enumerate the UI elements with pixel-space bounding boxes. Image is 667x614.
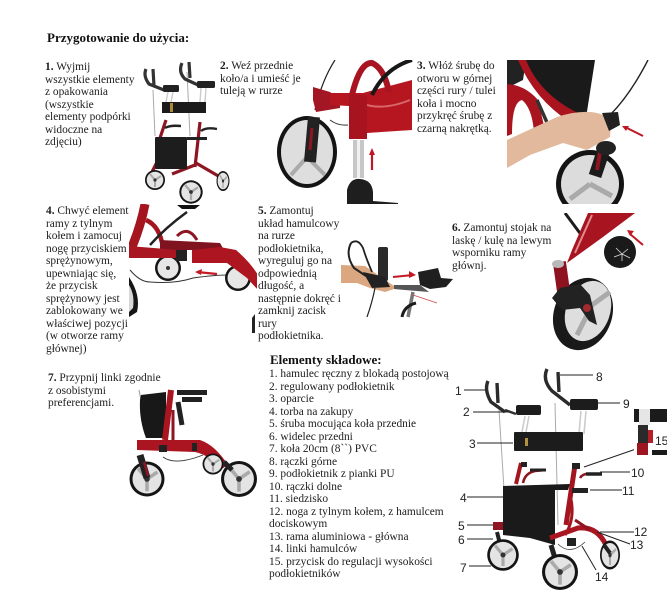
part number labels [455, 370, 648, 584]
text: step 3: koła i mocno [417, 98, 476, 110]
text: step 4 [46, 205, 129, 354]
list: parts: 2. regulowany podłokietnik [269, 380, 395, 392]
part number labels: 13 [630, 538, 644, 552]
text: step 4: (w otworze ramy [46, 330, 124, 342]
text: step 5: 5. Zamontuj [258, 205, 314, 217]
text: step 4: nogę przyciskiem [46, 242, 127, 254]
text: step 4: ramy z tylnym [46, 218, 112, 230]
text: step 5 [258, 205, 341, 342]
image: rear leg frame assembly, step 4 [129, 204, 258, 317]
text: step 1: elementy podpórki [45, 111, 131, 123]
part number labels: 4 [460, 491, 467, 505]
text: step 7: 7. Przypnij linki zgodnie [48, 372, 161, 384]
part number labels: 11 [622, 484, 635, 498]
list: parts: 6. widelec przedni [269, 430, 353, 442]
part number labels: 8 [596, 370, 603, 384]
text: step 1: z opakowania [45, 86, 108, 98]
text: step 6: wsporniku ramy [452, 247, 526, 259]
text: step 5: podłokietnika, [258, 242, 324, 254]
list: parts [269, 368, 449, 580]
illustrations layer [129, 60, 667, 590]
text: step 4: głównej) [46, 342, 86, 354]
image: folded walker side view, step 7 [130, 390, 257, 497]
list: parts: 7. koła 20cm (8``) PVC [269, 443, 377, 455]
list: parts: 14. linki hamulców [269, 543, 357, 555]
list: parts: 9. podłokietnik z pianki PU [269, 468, 395, 480]
text: step 1: zdjęciu) [45, 136, 82, 148]
heading: Elementy składowe: Elementy składowe: [270, 352, 382, 367]
text: step 3 [417, 60, 496, 134]
text: step 5: podłokietnika. [258, 330, 324, 342]
list: parts: 13. rama aluminiowa - główna [269, 530, 408, 542]
text: step 6: laskę / kulę na lewym [452, 234, 551, 246]
text: step 4: 4. Chwyć element [46, 205, 129, 217]
text: step 5: na rurze [258, 230, 295, 242]
text: step 4: sprężynowym, [46, 255, 113, 267]
text: step 4: zablokowany we [46, 305, 123, 317]
part number labels: 7 [460, 561, 467, 575]
text: step 4: że przycisk [46, 280, 98, 292]
text: step 3: części rury / tulei [417, 85, 496, 97]
text: step 7: z osobistymi [48, 384, 106, 396]
text: step 6 [452, 222, 552, 272]
part number labels: 3 [469, 437, 476, 451]
text: step 1: wszystkie elementy [45, 74, 135, 86]
text: step 1: widoczne na [45, 124, 102, 136]
list: parts: 11. siedzisko [269, 493, 328, 505]
list: parts: 4. torba na zakupy [269, 406, 353, 418]
part number labels: 10 [631, 466, 645, 480]
part number labels: 5 [458, 519, 465, 533]
text: step 2: koło/a i umieść je [220, 72, 301, 84]
text: step 4: właściwej pozycji [46, 318, 128, 330]
title: Przygotowanie do użycia: Przygotowanie do użycia: [47, 30, 189, 45]
text: step 3: otworu w górnej [417, 72, 492, 84]
text: step 2: tuleją w rurze [220, 85, 283, 97]
list: parts: 10. rączki dolne [269, 480, 342, 492]
walker body [487, 369, 620, 590]
leader lines [464, 375, 636, 570]
text: step 1: 1. Wyjmij [45, 61, 90, 73]
text: step 5: rury [258, 318, 277, 330]
image: hand tightening screw, step 3 [507, 60, 648, 218]
image: front wheel fitting, step 2 [277, 60, 412, 205]
image: brake grip on armrest, step 5 [252, 241, 453, 333]
text: step 5: odpowiednią [258, 268, 317, 280]
text: step 2: 2. Weź przednie [220, 60, 293, 72]
text: step 7: preferencjami. [48, 397, 114, 409]
list: parts: 5. śruba mocująca koła przednie [269, 418, 416, 430]
text: step 5: następnie dokręć i [258, 292, 341, 304]
part number labels: 2 [463, 405, 470, 419]
text: step 1 [45, 61, 135, 148]
part number labels: 1 [455, 384, 462, 398]
text: step 6: głównj. [452, 260, 486, 272]
list: parts: podłokietników [269, 568, 341, 580]
inset: height adjustment button [634, 409, 667, 455]
list: parts: 15. przycisk do regulacji wysokości [269, 556, 433, 568]
part number labels: 9 [623, 397, 630, 411]
part number labels: 14 [595, 570, 609, 584]
text: step 4: upewniając się, [46, 268, 116, 280]
text: step 3: przykręć śrubę z [417, 110, 492, 122]
image: cane holder on frame, step 6 [552, 213, 644, 350]
text: step 4: sprężynowy jest [46, 292, 120, 304]
text: step 5: długość, a [258, 280, 304, 292]
image: labelled walker diagram [455, 369, 667, 590]
list: parts: 12. noga z tylnym kołem, z hamulcem [269, 506, 444, 518]
list: parts: dociskowym [269, 518, 327, 530]
text: step 1: (wszystkie [45, 98, 94, 110]
part number labels: 12 [634, 525, 648, 539]
text: step 3: czarną nakrętką. [417, 122, 492, 134]
text: step 2 [220, 60, 301, 97]
text: step 4: kołem i zamocuj [46, 230, 122, 242]
text: step 7 [48, 372, 161, 409]
text: step 3: 3. Włóż śrubę do [417, 60, 495, 72]
part number labels: 6 [458, 533, 465, 547]
list: parts: 1. hamulec ręczny z blokadą postojową [269, 368, 449, 380]
list: parts: 8. rączki górne [269, 456, 337, 468]
image: walker with all elements, step 1 [145, 62, 230, 204]
list: parts: 3. oparcie [269, 393, 314, 405]
text: step 5: zamknij zacisk [258, 305, 326, 317]
text: step 5: wyreguluj go na [258, 255, 332, 267]
text: step 5: układ hamulcowy [258, 218, 339, 230]
text: step 6: 6. Zamontuj stojak na [452, 222, 551, 234]
